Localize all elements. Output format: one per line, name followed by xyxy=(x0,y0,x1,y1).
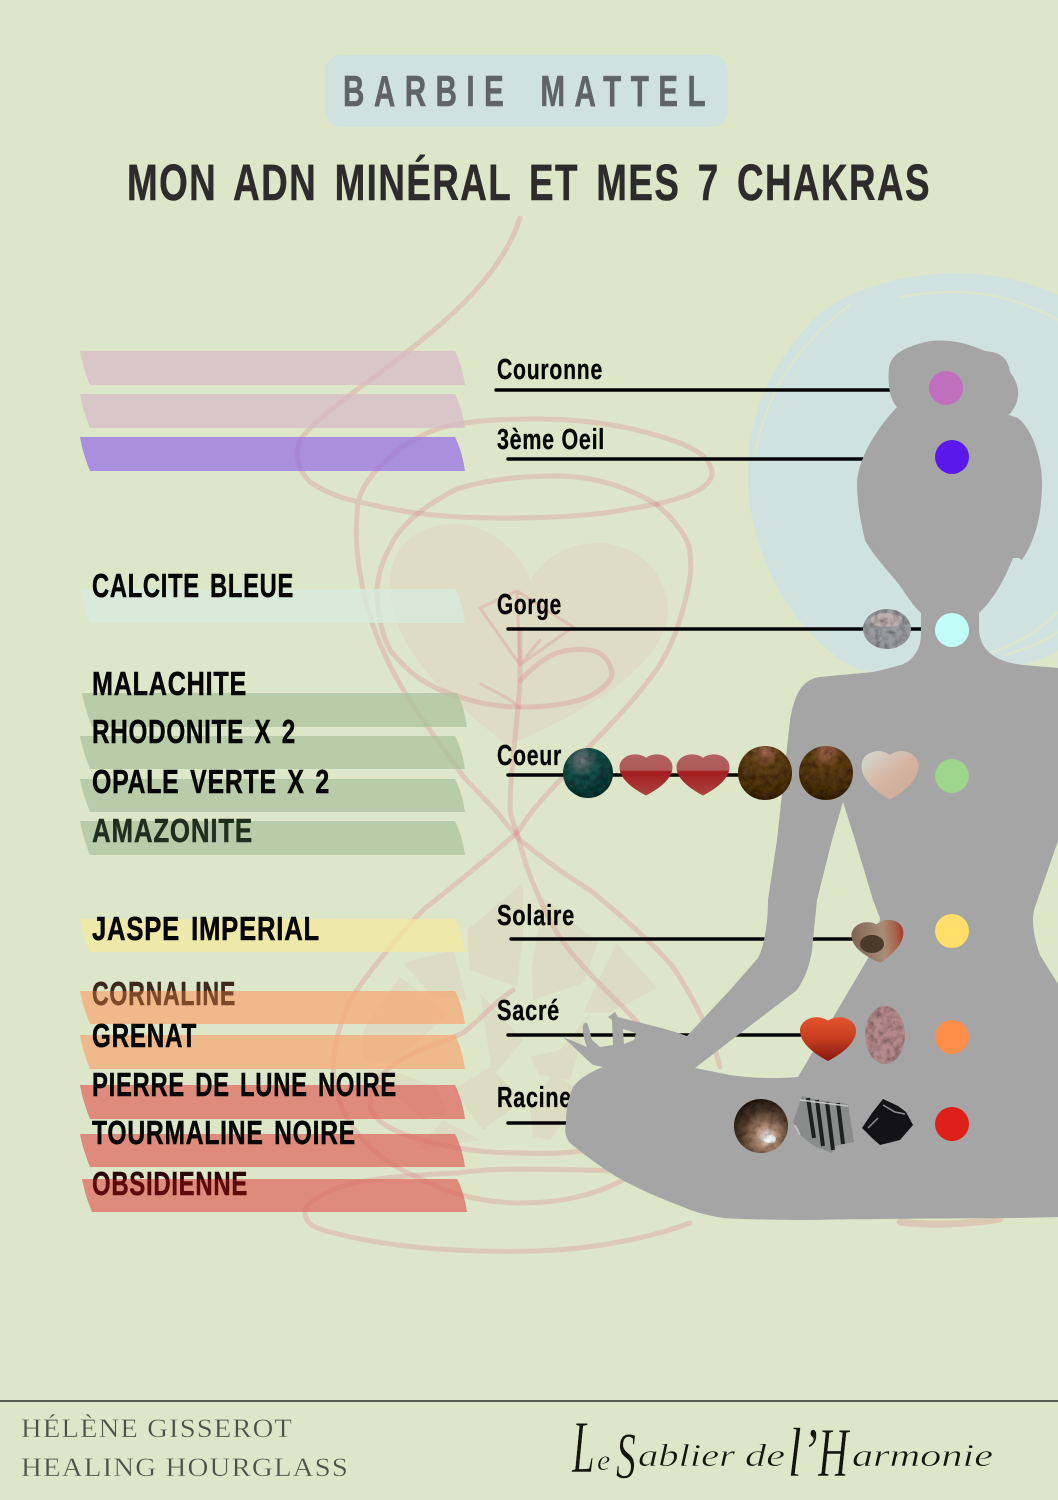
footer: script signature: H xyxy=(817,1415,851,1492)
panel: mineral colour bands xyxy=(80,351,467,1212)
band: coeur 2 xyxy=(80,736,465,769)
pill text: BARBIE MATTEL xyxy=(343,67,715,116)
band: sacre 2 xyxy=(80,1035,465,1069)
mineral: obsidienne: OBSIDIENNE xyxy=(92,1165,248,1202)
dot: couronne xyxy=(929,371,963,405)
dot: solaire xyxy=(935,914,969,948)
stone: jaspe imperial heart xyxy=(850,918,906,966)
band: couronne 2 xyxy=(80,394,465,428)
mineral: grenat: GRENAT xyxy=(92,1017,197,1054)
dot: racine xyxy=(935,1107,969,1141)
dot: sacre xyxy=(935,1020,969,1054)
band: racine 2 xyxy=(80,1134,465,1167)
stone: rhodonite heart 2 xyxy=(676,754,730,796)
band: troisieme oeil xyxy=(80,437,465,471)
list of minerals xyxy=(92,567,397,1202)
mineral: calcite bleue: CALCITE BLEUE xyxy=(92,567,294,604)
hourglass line drawing xyxy=(297,218,1000,1252)
mineral: amazonite: AMAZONITE xyxy=(92,812,253,849)
pale blue brush circle behind head xyxy=(748,273,1058,677)
mineral: malachite: MALACHITE xyxy=(92,665,247,702)
dot: gorge xyxy=(935,613,969,647)
label: gorge: Gorge xyxy=(497,589,562,621)
stone: opale verte sphere 2 xyxy=(799,746,853,800)
band: solaire xyxy=(80,919,465,952)
stone: obsidienne xyxy=(862,1099,913,1145)
footer: healing hourglass: HEALING HOURGLASS xyxy=(21,1453,349,1482)
label: sacre: Sacré xyxy=(497,995,560,1027)
stone: amazonite heart xyxy=(862,751,918,800)
footer: script signature: l’ xyxy=(788,1415,818,1492)
label: racine: Racine xyxy=(497,1082,572,1114)
chakra labels xyxy=(497,354,605,1114)
chakra leader lines xyxy=(496,390,925,1123)
band: coeur 3 xyxy=(80,779,465,812)
dot: coeur xyxy=(935,759,969,793)
band: couronne 1 xyxy=(80,351,465,385)
stone: grenat oval xyxy=(865,1006,905,1064)
mineral: rhodonite: RHODONITE X 2 xyxy=(92,713,296,750)
mineral: jaspe imperial: JASPE IMPERIAL xyxy=(92,910,320,947)
footer: script signature: e xyxy=(597,1444,610,1477)
footer: script signature: armonie xyxy=(852,1437,993,1473)
label: coeur: Coeur xyxy=(497,740,562,772)
footer: script signature: S xyxy=(616,1420,636,1493)
footer: script signature: L xyxy=(571,1406,595,1488)
stone: tourmaline noire xyxy=(793,1096,854,1153)
mineral: pierre de lune noire: PIERRE DE LUNE NOIRE xyxy=(92,1066,397,1103)
heart in upper bulb xyxy=(390,524,668,745)
label: couronne: Couronne xyxy=(497,354,603,386)
chakra dots xyxy=(929,371,969,1141)
footer divider xyxy=(0,1400,1058,1402)
footer: script signature: de xyxy=(745,1437,785,1473)
silhouette of meditating woman xyxy=(563,340,1058,1220)
label: 3eme oeil: 3ème Oeil xyxy=(497,424,605,456)
stone: pierre de lune noire sphere xyxy=(734,1099,788,1153)
band: gorge xyxy=(80,589,465,623)
stone: cornaline heart xyxy=(800,1017,856,1061)
mineral: tourmaline noire: TOURMALINE NOIRE xyxy=(92,1114,356,1151)
stone: rhodonite heart 1 xyxy=(620,754,672,796)
footer: author name: HÉLÈNE GISSEROT xyxy=(21,1414,293,1443)
footer: script signature: ablier xyxy=(638,1437,736,1473)
stone: calcite bleue xyxy=(863,609,911,649)
label: solaire: Solaire xyxy=(497,900,575,932)
band: racine 3 xyxy=(82,1179,467,1212)
dot: 3eme oeil xyxy=(935,440,969,474)
band: coeur 1 xyxy=(82,693,467,727)
mineral: cornaline: CORNALINE xyxy=(92,975,236,1012)
title pill xyxy=(325,55,728,127)
crystal in lower bulb xyxy=(363,883,657,1150)
band: coeur 4 xyxy=(80,821,465,855)
stone: malachite sphere xyxy=(563,748,613,798)
band: racine 1 xyxy=(80,1085,465,1119)
watermark: hourglass logo xyxy=(297,218,1000,1252)
stone: opale verte sphere 1 xyxy=(738,746,792,800)
footer: script signature xyxy=(571,1406,993,1493)
mineral: opale verte: OPALE VERTE X 2 xyxy=(92,763,330,800)
band: sacre 1 xyxy=(80,991,465,1024)
